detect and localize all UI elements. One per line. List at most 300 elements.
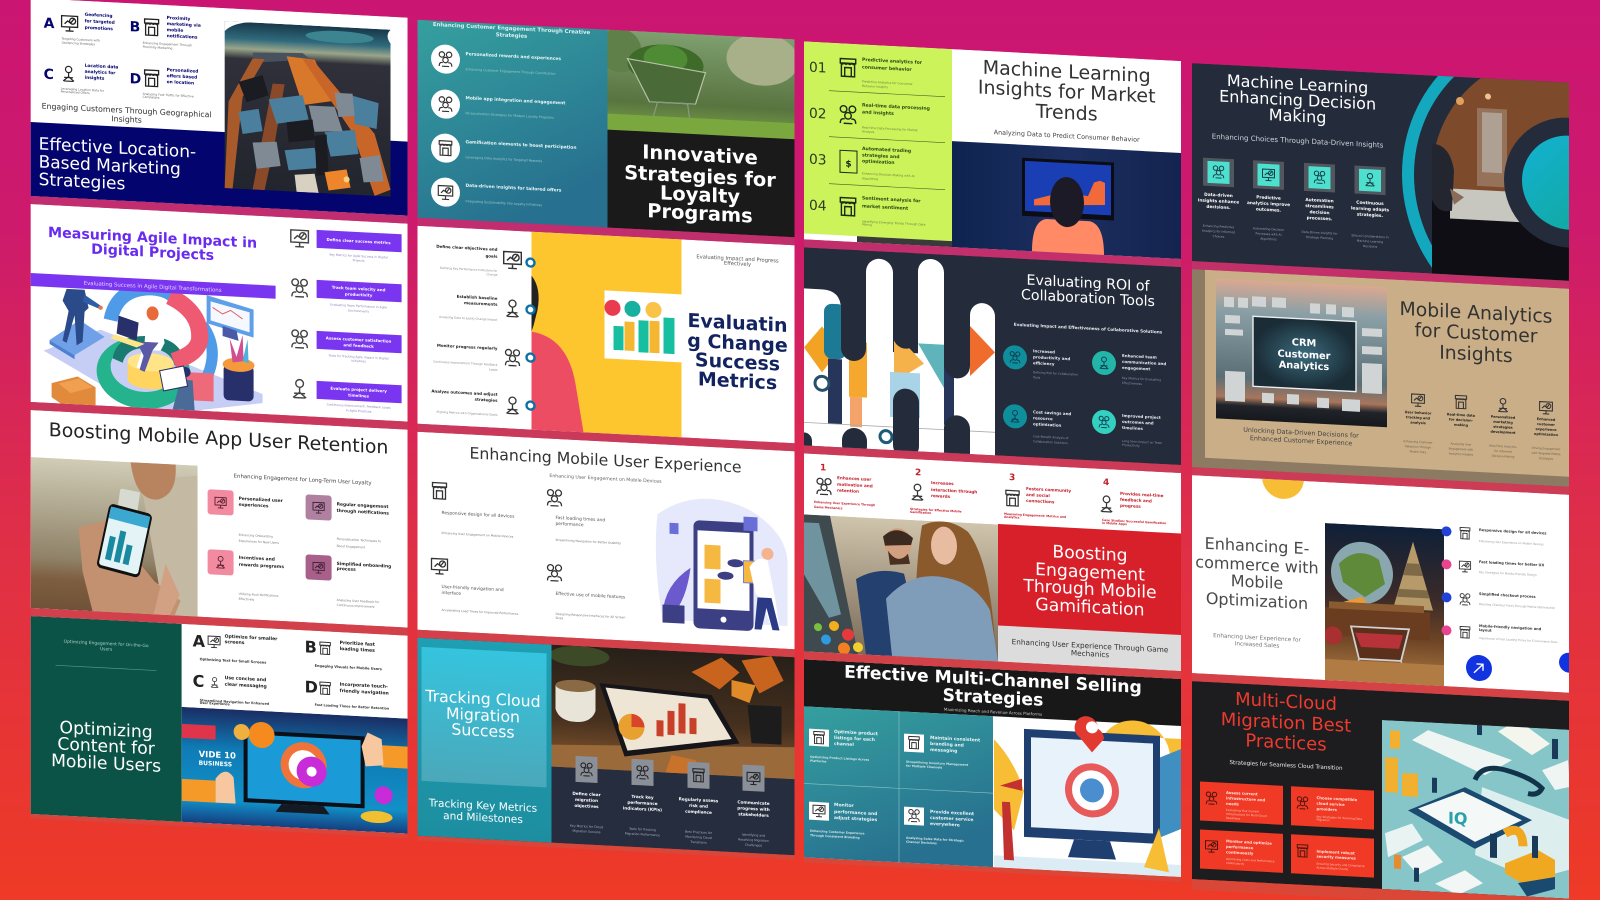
step 4 (737, 764, 770, 848)
subtitle: Evaluating Impact and Progress (696, 254, 779, 264)
step 2: Tools for Tracking (628, 827, 656, 832)
heading: Effective Location- (39, 134, 196, 163)
heading: Practices (1245, 730, 1327, 756)
item B: notifications (167, 33, 198, 41)
feature 4 (1531, 401, 1561, 461)
pill illustration (796, 245, 995, 472)
subtitle: Strategies for Seamless Cloud Transition (1229, 760, 1343, 772)
strategy 2: branding and (930, 741, 964, 749)
strategy 4: customer service (930, 815, 973, 823)
step 3: connections (1026, 498, 1055, 504)
step 2: productivity (345, 291, 373, 298)
cart photo (608, 30, 794, 140)
step 1: retention (837, 488, 859, 494)
benefit 2: Key Metrics for Evaluating (1122, 376, 1161, 382)
item D: Analyzing Foot Traffic for Effective (143, 92, 194, 98)
step 04: Sentiment analysis for (862, 195, 921, 204)
practice 2: Key Strategies for Securing Data (1316, 815, 1362, 821)
step 1: Key Metrics for Agile Success in Digital (330, 253, 388, 260)
item C (193, 671, 270, 708)
strategy 3: performance and (834, 809, 877, 817)
step 1: migration (575, 797, 598, 803)
step 3 (292, 330, 402, 365)
feature 4: Effective use of mobile features (556, 591, 626, 601)
step 02: Analysis (862, 129, 875, 134)
item 3: Simplified checkout process (1479, 592, 1536, 599)
item C (44, 61, 118, 97)
subtitle: Engaging Customers Through Geographical (42, 102, 212, 119)
panel subtitle: Users (100, 646, 113, 653)
list item 1: Personalized rewards and experiences (466, 51, 561, 62)
benefit 3: optimization (1033, 421, 1061, 428)
slide: Boosting Mobile App User Retention (31, 410, 408, 628)
step 02: Real-time data processing (862, 102, 930, 112)
step 4: progress with (737, 805, 770, 812)
item 2: Fast loading times for better UX (1479, 560, 1544, 567)
slide: Multi-Cloud Migration Best Practices (1192, 681, 1570, 900)
feature 2 (1447, 395, 1476, 457)
card 4: Simplified onboarding (337, 561, 391, 570)
card 1: Personalized user (239, 496, 284, 504)
step 1: objectives (574, 803, 599, 809)
step 3: and social (1026, 492, 1050, 498)
step 1: Enhances user (837, 475, 872, 482)
step 3: Strategic Planning (1306, 235, 1333, 240)
practice 3: performance (1226, 844, 1254, 850)
edge button (1559, 652, 1579, 673)
card 2: Regular engagement (337, 501, 388, 510)
feature 4: Enhanced (1537, 417, 1556, 422)
red title panel (998, 524, 1181, 636)
item B: Enhancing Engagement Through (143, 41, 192, 47)
feature 2: for decision- (1449, 417, 1474, 423)
strategy 4: everywhere (930, 821, 960, 829)
step 2: rewards (931, 493, 951, 499)
feature 4: Sizes (556, 616, 564, 620)
feature 3: interface (442, 590, 461, 597)
step 3: Monitor progress regularly (437, 343, 498, 351)
item 4: layout (1479, 628, 1492, 633)
arcade photo (804, 514, 998, 662)
benefit 2 (1092, 350, 1166, 387)
step 4: Resolving Migration (738, 837, 769, 843)
step 1 (436, 244, 534, 279)
list item 4 (431, 177, 562, 213)
feature 3: marketing (1493, 420, 1513, 425)
list item 1 (431, 44, 561, 80)
subtitle: Evaluating Impact and Effectiveness of Collaborative Solutions (1014, 322, 1163, 335)
benefit 4: Long-term Impact on Team (1122, 439, 1162, 445)
slide: Evaluating Change Success Metrics (418, 226, 794, 443)
card 1: Enhancing Onboarding (239, 533, 273, 539)
item C: C (44, 67, 54, 83)
step 1: Analytics for Informed (1202, 229, 1235, 234)
item D (305, 677, 390, 711)
step 1: Enhancing Predictive (1203, 224, 1234, 229)
practice 1: Infrastructure for Multi-Cloud (1226, 812, 1267, 818)
feature 3: Decision Making (1492, 454, 1515, 459)
step 03 (809, 143, 915, 183)
slide: Effective Location-Based Marketing Strategies (31, 0, 408, 216)
step 01: Predictive analytics for (862, 57, 923, 66)
isometric illustration: IQ (1448, 808, 1468, 828)
feature 4: with Targeted Mobile (1531, 451, 1561, 456)
caption band (998, 625, 1181, 671)
feature 2 (548, 489, 621, 545)
item 1 (1442, 526, 1547, 547)
step 02: 02 (809, 106, 827, 123)
practice 3: continuously (1226, 849, 1254, 856)
card 3: Utilizing Push Notifications (239, 592, 279, 598)
subtitle: Mechanics (1071, 648, 1109, 659)
heading: Engagement (1035, 560, 1145, 586)
subtitle: Enhancing Choices Through Data-Driven Insights (1212, 133, 1384, 150)
CRM photo: Customer (1277, 349, 1331, 362)
item D: Incorporate touch- (340, 682, 388, 690)
item C: clear messaging (225, 682, 267, 690)
step 1: Change (486, 272, 498, 277)
feature 3: User-friendly navigation and (442, 584, 504, 593)
list item 3: Leveraging Data Analytics for Targeted Rewards (466, 155, 542, 163)
screen chart (1022, 158, 1114, 221)
isometric illustration (44, 283, 263, 415)
heading: Evaluating ROI of (1026, 272, 1151, 295)
step 4: 4 (1103, 478, 1109, 488)
step 4: Communicate (737, 799, 770, 806)
CRM photo (1216, 278, 1387, 427)
heading: Making (1269, 105, 1326, 127)
heading: Strategies (39, 170, 126, 194)
list item 3 (431, 133, 576, 169)
benefit 1 (1003, 345, 1078, 382)
step 3: Measuring Engagement: Metrics and (1004, 512, 1066, 519)
step 3: Automation (1305, 197, 1334, 204)
heading: Boosting (1052, 542, 1128, 566)
step 02 (809, 100, 930, 137)
heading: Measuring Agile Impact in (48, 225, 257, 252)
practice 4: Across Multiple Clouds (1316, 866, 1348, 871)
heading: Machine Learning (983, 57, 1151, 87)
person (532, 276, 584, 432)
item D (130, 65, 198, 102)
subtitle: Analyzing Data to Predict Consumer Behavior (994, 128, 1140, 144)
step 2: Establish baseline (457, 294, 498, 301)
strategy 4: Channel Decisions (906, 840, 937, 845)
step 03: Automated trading (862, 146, 911, 154)
card 2 (306, 494, 389, 551)
slide: Measuring Agile Impact in Digital Projects (31, 204, 408, 423)
step 2: outcomes. (1256, 206, 1281, 214)
heading: Collaboration Tools (1021, 287, 1155, 310)
item B: marketing via (167, 21, 201, 29)
item 4: Mobile-friendly navigation and (1479, 624, 1542, 631)
practice 2: cloud service (1316, 801, 1345, 807)
subtitle: Unlocking Data-Driven Decisions for (1243, 426, 1359, 440)
item C: Leveraging Location Data for (61, 87, 105, 93)
practice 1 (1200, 782, 1283, 825)
step 1: Define clear objectives and (436, 244, 498, 252)
step 4 (1351, 165, 1389, 249)
step 2: indicators (KPIs) (623, 805, 662, 812)
strategy 1 (809, 728, 879, 766)
slide: Effective Multi-Channel Selling Strategies (804, 659, 1181, 877)
step 1: Defining Key Performance Indicators for (440, 266, 498, 273)
feature 3 (432, 558, 519, 616)
item B: B (305, 637, 317, 657)
purple banner (31, 273, 276, 299)
heading: Optimizing (60, 718, 153, 743)
item D: offers based (167, 73, 197, 81)
step 2: Strategies for Effective Mobile (910, 507, 962, 514)
heading: commerce with (1195, 552, 1319, 578)
step 01: 01 (809, 60, 827, 77)
step 1: Key Metrics for Cloud (570, 824, 603, 829)
step 4 (431, 388, 534, 419)
strategy 3 (809, 801, 877, 841)
benefit 2: Effectiveness (1122, 381, 1142, 386)
yellow wall (532, 232, 682, 437)
step 4: timelines (348, 393, 370, 399)
subtitle: Tracking Key Metrics (428, 797, 537, 815)
step 4: stakeholders (738, 811, 769, 818)
heading: Migration (446, 704, 520, 727)
benefit 3: resource (1033, 415, 1053, 421)
marketing illustration (182, 707, 408, 834)
practice 2: providers (1316, 806, 1338, 812)
feature 4: optimization (1534, 432, 1559, 437)
slide: Machine Learning Enhancing Decision Making (1192, 6, 1600, 347)
feature 4 (548, 564, 626, 624)
step 4: Evaluate project delivery (330, 386, 387, 394)
card 3: rewards programs (239, 562, 284, 570)
benefit 4: Productivity (1122, 443, 1140, 448)
slide: Enhancing Mobile User Experience (418, 432, 794, 649)
item 2: Key Strategies for Mobile-Friendly Design (1479, 570, 1537, 577)
practice 2: Migration (1316, 818, 1330, 822)
step 2: interaction through (931, 487, 977, 494)
item A: Geofencing Strategies (62, 41, 95, 46)
step 2: performance (627, 800, 658, 806)
step 1: Game Mechanics (814, 505, 843, 510)
item B (130, 13, 201, 52)
item B: Prioritize fast (340, 640, 376, 648)
heading: Content for (57, 734, 156, 760)
step 3: Analytics (1004, 515, 1020, 520)
item C: C (193, 671, 204, 691)
practice 1: Assess current (1226, 790, 1258, 797)
slide: Enhancing E-commerce with Mobile Optimization (1192, 452, 1579, 693)
heading: Enhancing Mobile User Experience (470, 443, 741, 477)
item B: B (130, 19, 140, 36)
item B: mobile (167, 27, 183, 34)
step 01: consumer behavior (862, 64, 912, 73)
step 3: Continuous Improvement Through Feedback (433, 360, 498, 367)
heading: Evaluatin (687, 310, 788, 337)
step 03: $ (845, 160, 852, 170)
list item 4: Integrating Sustainability into Loyalty Initiatives (466, 199, 542, 207)
heading: Success (451, 719, 515, 742)
slide: Mobile Analytics for Customer Insights (1192, 269, 1569, 487)
step 4: Continuous Improvement: Feedback Loops (327, 402, 391, 410)
feature 1: Mobile Data (1410, 449, 1427, 454)
item 3: Boosting Checkout Flows Through Mobile Optimization (1479, 602, 1555, 610)
step 1: goals (485, 253, 498, 259)
feature 2: Fast loading times and (556, 515, 605, 523)
feature 1 (1403, 393, 1433, 455)
step 1 (814, 463, 875, 512)
panel subtitle: Optimizing Engagement for On-the-Go (64, 639, 149, 649)
strategy 4 (904, 807, 975, 847)
item A: promotions (85, 25, 113, 32)
step 4: Case Studies: Successful Gamification (1102, 518, 1166, 525)
item D: D (305, 677, 318, 697)
step 1: motivation and (837, 482, 873, 488)
subtitle: Maximizing Reach and Revenue Across Platforms (944, 707, 1042, 717)
strategy 1: listings for each (834, 735, 875, 743)
item A: for targeted (85, 18, 115, 26)
green panel (31, 616, 182, 822)
practice 4: Ensuring Security and Compliance (1316, 862, 1365, 868)
strategy 3: adjust strategies (834, 815, 877, 823)
practice 1: needs (1226, 801, 1240, 807)
feature 1: analysis (1410, 420, 1426, 425)
step 04: market sentiment (862, 203, 909, 212)
benefit 4: timelines (1122, 425, 1143, 431)
benefit 2: communication and (1122, 359, 1166, 366)
feature 2: Analyzing User (1451, 442, 1472, 447)
step 3: decision (1309, 209, 1330, 216)
subtitle: Enhancing Engagement for Long-Term User Loyalty (234, 474, 372, 487)
phone illustration (656, 496, 788, 633)
benefit 4 (1092, 409, 1162, 449)
heading: Innovative (642, 140, 758, 169)
step 2: Increases (931, 480, 954, 486)
benefit 3 (1003, 404, 1071, 445)
step 4: Challenges (745, 843, 762, 848)
city photo (224, 21, 391, 197)
feature 1: Enhancing Customer (1403, 439, 1433, 445)
item 1: Responsive design for all devices (1479, 528, 1547, 536)
list item 1: Enhancing Customer Engagement Through Gamification (466, 67, 555, 76)
item A (193, 631, 278, 665)
subtitle: Enhancing User Experience for (1213, 633, 1301, 644)
feature 1: Responsive design for all devices (442, 510, 515, 520)
heading: Insights for Market (978, 76, 1156, 108)
practice 2 (1291, 786, 1374, 830)
step 2: measurements (464, 300, 498, 307)
heading: Multi-Cloud (1235, 689, 1337, 715)
phone photo (30, 457, 198, 616)
step 1: insights enhance (1198, 197, 1239, 206)
arrow button (1466, 654, 1492, 682)
step 2: Analyzing Data to Justify Change Impact (439, 315, 498, 322)
strategy 1: Optimizing Product Listings Across (810, 755, 869, 762)
subtitle: Effectively (724, 261, 751, 268)
step 01: Predictive Analytics for Consumer (862, 79, 913, 86)
step 02: and insights (862, 109, 894, 117)
step 4 (1101, 478, 1166, 528)
step 1 (1198, 157, 1239, 240)
item A: screens (225, 639, 245, 646)
strategy 4: Analyzing Sales Data for Strategic (906, 836, 964, 843)
heading: Boosting Mobile App User Retention (49, 419, 388, 459)
practice 3: Monitor and optimize (1226, 838, 1272, 846)
step 3: Best Practices for (685, 830, 713, 835)
step 01 (809, 54, 923, 91)
teal grid panel (804, 706, 993, 867)
heading: Mobile Users (51, 751, 161, 777)
step 2 (1247, 160, 1290, 242)
step 04 (809, 193, 926, 230)
subtitle: Enhancing User Engagement on Mobile Devices (549, 473, 662, 485)
step 4: Aligning Metrics with Organizational Goals (436, 410, 498, 417)
item A: A (44, 16, 55, 32)
feature 4: Driving Engagement (1532, 446, 1561, 451)
item A: Optimize for smaller (225, 634, 278, 642)
step 2: Automating Decision (1253, 226, 1284, 232)
benefit 4: Improved project (1122, 413, 1161, 420)
step 3 (679, 761, 719, 845)
tablet photo (552, 644, 794, 780)
subtitle: Enhanced Customer Experience (1250, 434, 1352, 447)
strategy 2: Streamlining Inventory Management (906, 760, 969, 767)
item B: loading times (340, 646, 375, 654)
practice 1: infrastructure and (1226, 795, 1266, 802)
heading: Digital Projects (91, 242, 214, 264)
list item 2 (431, 89, 565, 125)
feature 1: Retention Through (1405, 444, 1431, 450)
panel heading: Enhancing Customer Engagement Through Creative (433, 22, 590, 36)
heading: for Customer (1414, 320, 1538, 348)
feature 4: customer (1537, 422, 1555, 427)
step 1: Projects (353, 258, 365, 263)
heading: Mobile Analytics (1400, 299, 1552, 328)
step 3: streamlines (1305, 203, 1334, 210)
subtitle: and Milestones (443, 810, 523, 826)
step 3 (433, 343, 534, 374)
item D: D (130, 71, 141, 88)
practice 3 (1200, 830, 1283, 873)
heading: Strategies for (624, 161, 776, 192)
step 3: compliance (685, 809, 712, 815)
step 2: Environments (348, 309, 369, 314)
heading: Trends (1035, 100, 1098, 126)
strategy 4: Provide excellent (930, 809, 975, 817)
item A: Geofencing (85, 12, 113, 19)
item B (305, 637, 382, 671)
step 1: Data-driven (1204, 192, 1233, 199)
slide: Optimizing Content for Mobile Users (31, 616, 408, 834)
step 2 (910, 468, 977, 517)
benefit 3: Collaboration Solutions (1033, 439, 1068, 445)
step 2: Track key (631, 794, 654, 800)
heading: Migration Best (1221, 709, 1351, 737)
strategy 2 (904, 734, 981, 772)
step 1: Define clear success metrics (327, 237, 391, 245)
target illustration (994, 711, 1181, 877)
step 1: 1 (820, 463, 826, 474)
card 2: Personalization Techniques to (337, 537, 381, 543)
step 4: in Mobile Apps (1102, 521, 1127, 526)
strategy 2: Maintain consistent (930, 735, 981, 744)
step 1 (291, 229, 402, 265)
practice 3: Optimizing Costs and Performance (1226, 857, 1275, 863)
step 3: risk and (689, 803, 708, 809)
step 03: Enhancing Decision-Making with AI (862, 171, 915, 178)
purple banner: Evaluating Success in Agile Digital Transformations (84, 281, 222, 294)
step 3: Assess customer satisfaction (326, 335, 392, 344)
benefit 1: efficiency (1033, 360, 1055, 366)
